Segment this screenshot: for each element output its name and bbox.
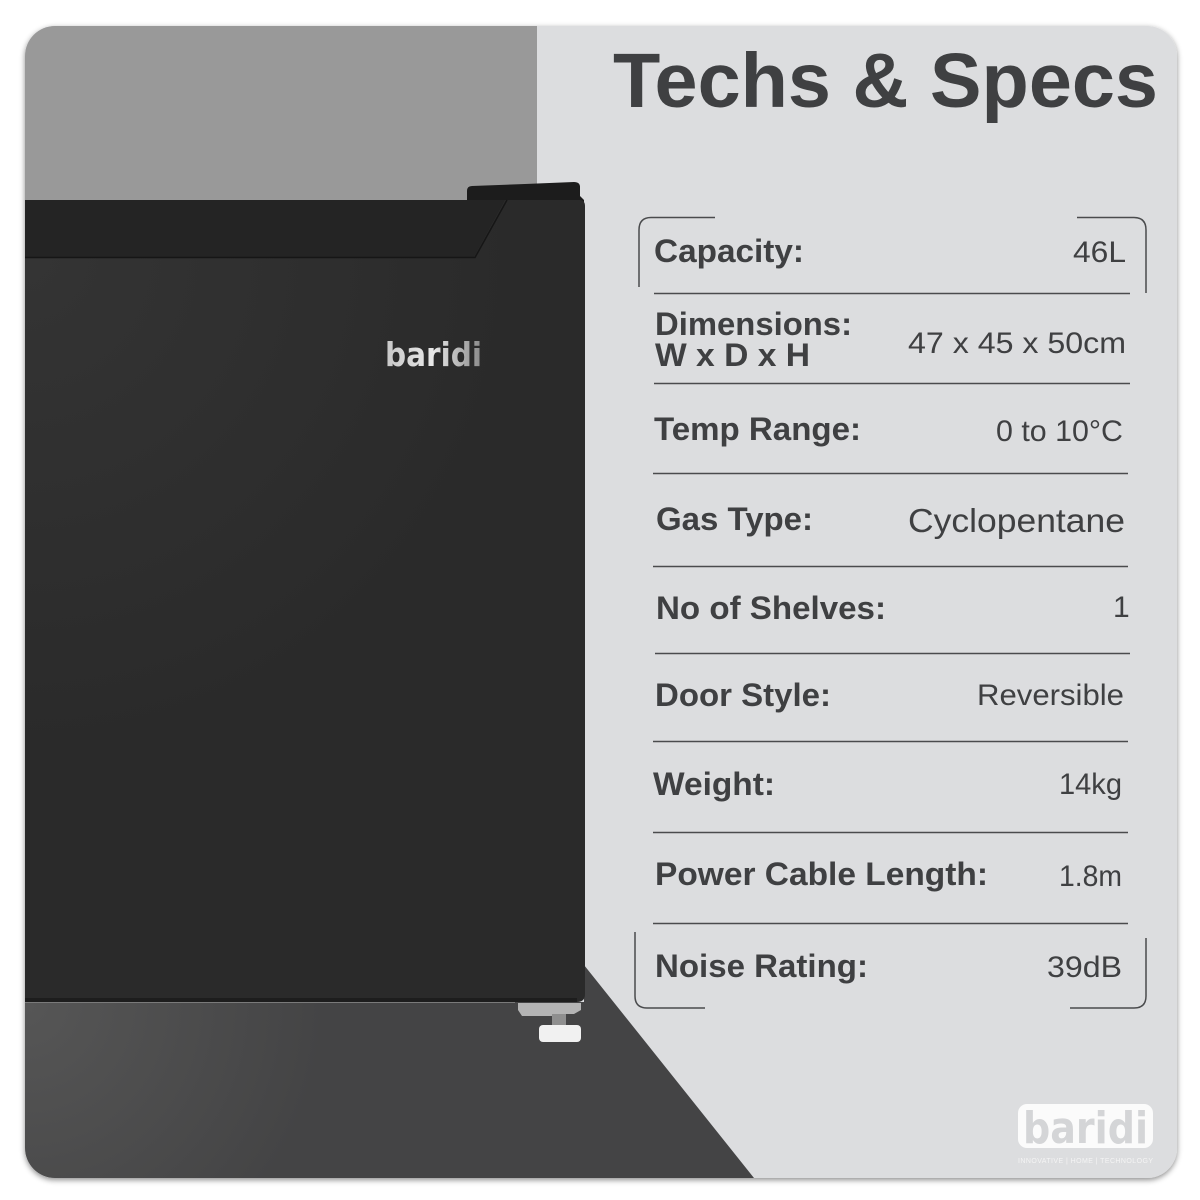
row: door style: Door Style: [655,677,831,713]
row: weight: 14kg [1059,768,1122,801]
foot stem [552,1014,566,1026]
logo plate [1018,1104,1153,1148]
spec table [635,218,1146,1008]
row: temp range [654,411,1123,448]
row: gas type [656,501,1125,539]
row: gas type: Cyclopentane [908,502,1125,539]
row: noise rating: Noise Rating: [655,948,868,984]
logo wordmark: baridi [1023,1103,1148,1154]
bottom bracket [635,932,1146,1008]
row: dimensions [655,306,1126,373]
backdrop shapes [25,26,754,1178]
row: dimensions: Dimensions: [655,306,852,342]
fridge hinge [467,182,584,204]
floor edge highlight [25,1002,515,1003]
row: shelves: 1 [1113,591,1130,624]
row: dimensions: W x D x H [655,337,810,373]
row: shelves [656,590,1130,626]
row: gas type: Gas Type: [656,501,813,537]
logo tagline: INNOVATIVE | HOME | TECHNOLOGY [1018,1158,1153,1165]
row: noise rating: 39dB [1047,951,1122,984]
foot knob [539,1025,581,1042]
title: Techs & Specs [613,38,1158,124]
row: temp range: 0 to 10°C [996,415,1123,448]
row: weight [653,766,1122,802]
row: noise rating [655,948,1122,984]
row: weight: Weight: [653,766,775,802]
door bottom shade [25,998,577,1002]
row: power cable: Power Cable Length: [655,856,988,892]
top bracket [639,218,1146,293]
row: door style [655,677,1124,713]
fridge logo: baridi [385,335,482,374]
adjustable foot [518,1003,581,1042]
row: power cable [655,856,1122,893]
dark floor panel [25,965,754,1178]
row: power cable: 1.8m [1059,860,1122,893]
fridge top recess [25,200,505,257]
row: door style: Reversible [977,679,1124,712]
row: temp range: Temp Range: [654,411,861,447]
brand logo [1018,1103,1153,1165]
row: shelves: No of Shelves: [656,590,886,626]
foot bracket [518,1003,581,1016]
grey wall panel [25,26,537,202]
row: capacity: 46L [1073,236,1126,269]
fridge door [25,200,585,1002]
row: capacity: Capacity: [654,233,804,269]
row: capacity [654,233,1126,269]
row: dimensions: 47 x 45 x 50cm [908,327,1126,360]
fridge product image [25,182,585,1042]
